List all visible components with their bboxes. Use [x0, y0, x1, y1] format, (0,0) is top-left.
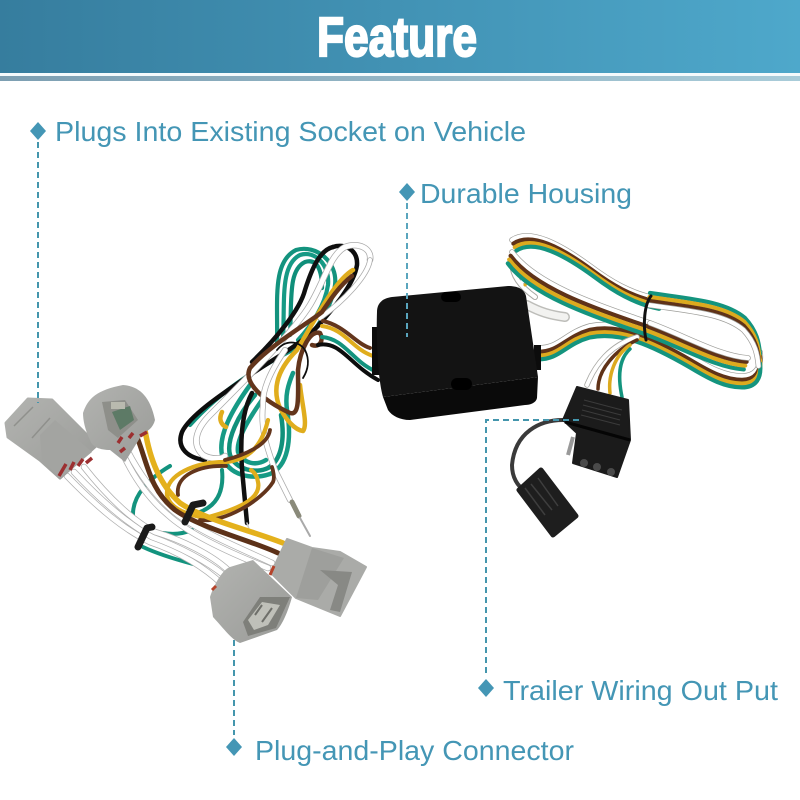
connector: upper grey socket	[83, 385, 155, 462]
title: Feature	[317, 5, 477, 68]
callout: durable housing	[399, 178, 632, 337]
callout: plug-and-play connector: Plug-and-Play Connector	[255, 735, 574, 766]
callout: trailer wiring out put	[478, 420, 778, 706]
callout: plugs into existing socket: Plugs Into Existing Socket on Vehicle	[55, 116, 526, 147]
product photo: wiring harness	[6, 236, 760, 643]
fan-out to plug	[587, 337, 637, 385]
callout: durable housing: Durable Housing	[420, 178, 632, 209]
control box housing	[372, 286, 541, 420]
terminal pin	[247, 502, 310, 536]
connector: lower grey socket	[210, 560, 292, 643]
cable ties	[185, 503, 203, 522]
header banner	[0, 0, 800, 81]
harness branches to lower connectors	[67, 430, 283, 584]
callout: trailer wiring out put: Trailer Wiring Out Put	[503, 675, 778, 706]
connector: lower right grey	[270, 539, 366, 616]
ribbon strap	[644, 296, 651, 340]
connector: upper left grey	[6, 399, 97, 478]
callout: plugs into existing socket	[30, 116, 526, 403]
flat four-wire ribbon	[508, 236, 760, 397]
loose wires bundle	[133, 245, 378, 564]
callout: plug-and-play connector	[226, 640, 574, 766]
trailer flat-four plug	[512, 387, 630, 535]
